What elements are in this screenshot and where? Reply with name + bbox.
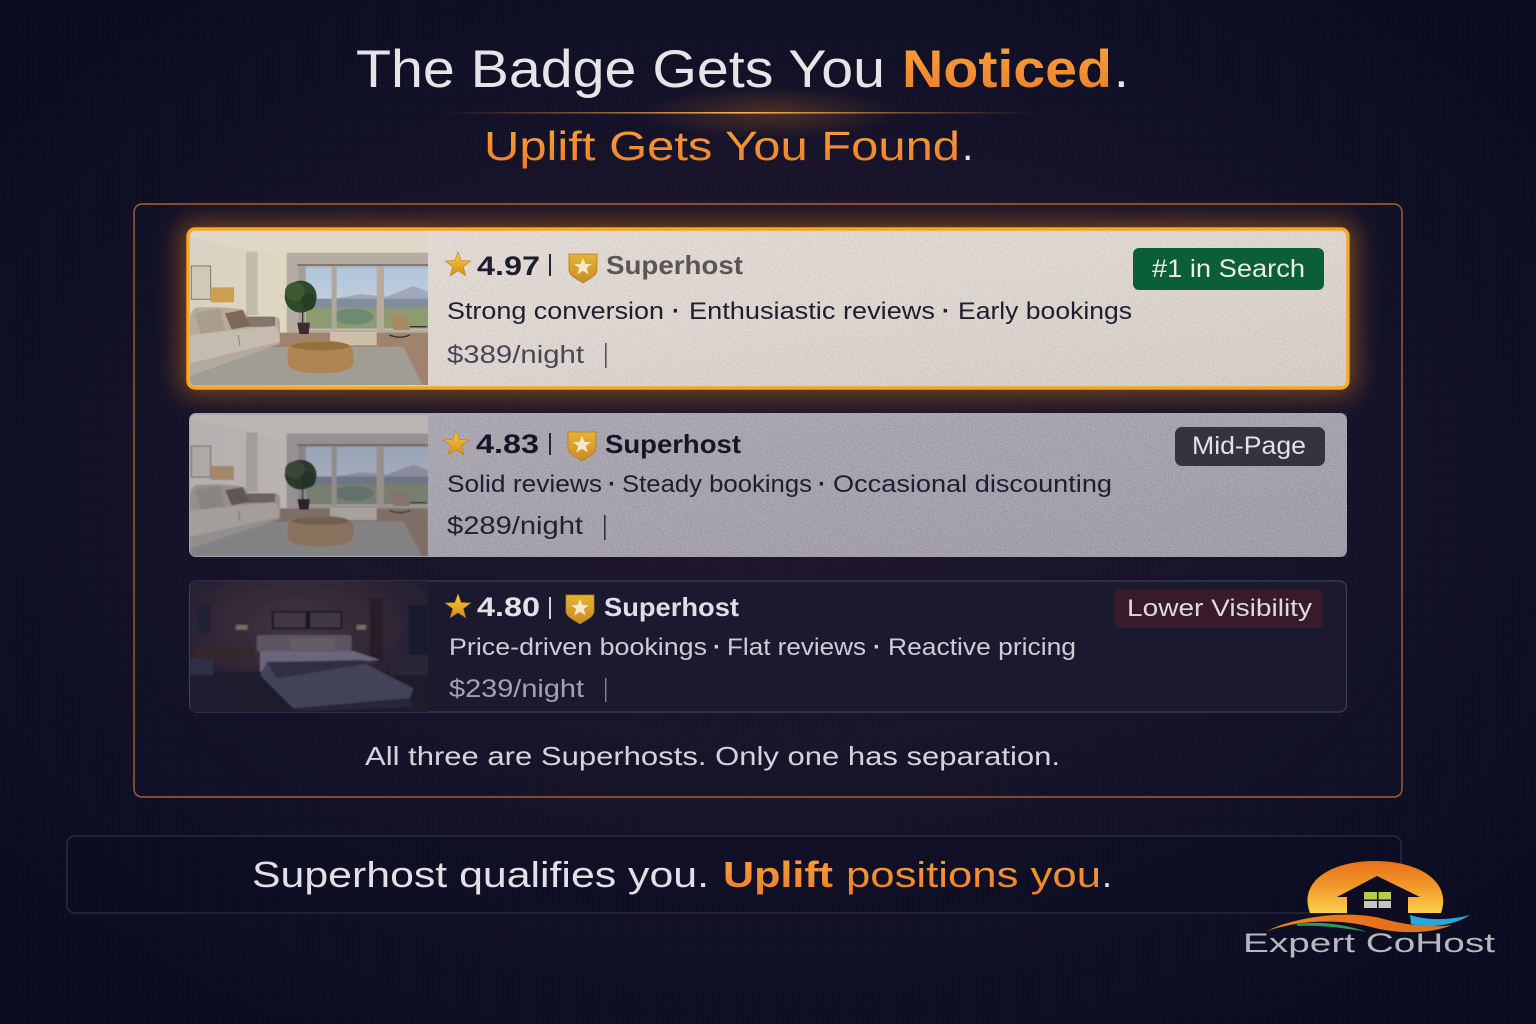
- title: The Badge Gets You Noticed: The Badge Gets You: [356, 40, 885, 99]
- traits: Occasional discounting: [833, 471, 1112, 498]
- photo: muted living room: [187, 409, 430, 562]
- traits: ·: [713, 634, 721, 661]
- photo: dim bedroom: [190, 580, 429, 713]
- traits: Price-driven bookings: [449, 634, 707, 661]
- panel: bottom takeaway: .: [1102, 854, 1112, 895]
- Superhost badge: Superhost: [605, 429, 741, 459]
- rating 4.80: 4.80: [477, 592, 540, 622]
- traits: ·: [818, 471, 826, 498]
- traits: [449, 634, 1076, 661]
- rank tag: Lower Visibility: Lower Visibility: [1127, 595, 1312, 622]
- Superhost badge: Superhost: [604, 592, 739, 622]
- rank tag: #1 in Search: [1133, 248, 1324, 290]
- traits: Flat reviews: [727, 634, 866, 661]
- panel: bottom takeaway: positions you: [846, 854, 1101, 895]
- traits: ·: [608, 471, 616, 498]
- subtitle: Uplift Gets You Found: .: [962, 123, 973, 169]
- logo wordmark: Expert CoHost: [1243, 928, 1496, 958]
- rating 4.80: [445, 592, 551, 622]
- caption: All three are Superhosts. Only one has separation.: [365, 741, 1060, 771]
- title: The Badge Gets You Noticed: Noticed: [902, 40, 1112, 99]
- logo house: [1337, 876, 1420, 917]
- Superhost badge: Superhost: [606, 250, 743, 280]
- panel: bottom takeaway: Superhost qualifies you.: [252, 854, 709, 895]
- rating 4.97: [445, 251, 551, 281]
- traits: Reactive pricing: [888, 634, 1076, 661]
- logo waves: [1267, 915, 1470, 932]
- subtitle: Uplift Gets You Found: Uplift Gets You Found: [484, 123, 960, 169]
- panel: listing comparison: [134, 204, 1402, 797]
- Superhost badge: [569, 250, 743, 283]
- listing card 1: top result: [180, 222, 1356, 395]
- price: $289/night: [447, 512, 583, 540]
- logo: Expert CoHost: [1243, 861, 1496, 958]
- traits: ·: [942, 298, 950, 325]
- rank tag: Mid-Page: [1175, 427, 1325, 466]
- rank tag: #1 in Search: #1 in Search: [1152, 255, 1305, 283]
- panel: bottom takeaway: [67, 836, 1401, 913]
- listing card 2: mid-page: [187, 409, 1347, 562]
- Superhost badge: [566, 592, 739, 624]
- price: $239/night: [449, 675, 584, 703]
- logo sun: [1307, 861, 1443, 913]
- traits: Steady bookings: [622, 471, 812, 498]
- traits: ·: [873, 634, 881, 661]
- traits: ·: [672, 298, 680, 325]
- rating 4.97: 4.97: [477, 251, 540, 281]
- title: The Badge Gets You Noticed: [356, 40, 1129, 99]
- rating 4.83: [443, 429, 551, 459]
- title: The Badge Gets You Noticed: .: [1114, 40, 1129, 99]
- rank tag: Lower Visibility: [1114, 589, 1323, 628]
- rating 4.83: 4.83: [476, 429, 539, 459]
- traits: Enthusiastic reviews: [689, 298, 935, 325]
- panel: bottom takeaway: Uplift: [723, 854, 833, 895]
- rank tag: Mid-Page: Mid-Page: [1192, 432, 1306, 460]
- photo: bright living room: [187, 227, 430, 390]
- traits: Early bookings: [958, 298, 1132, 325]
- title divider: [440, 87, 1040, 139]
- Superhost badge: [568, 429, 741, 461]
- traits: [447, 298, 1132, 325]
- listing card 3: lower visibility: [190, 580, 1346, 713]
- traits: Solid reviews: [447, 471, 602, 498]
- logo window: [1364, 892, 1391, 908]
- price: $389/night: [447, 341, 584, 369]
- traits: Strong conversion: [447, 298, 664, 325]
- traits: [447, 471, 1112, 498]
